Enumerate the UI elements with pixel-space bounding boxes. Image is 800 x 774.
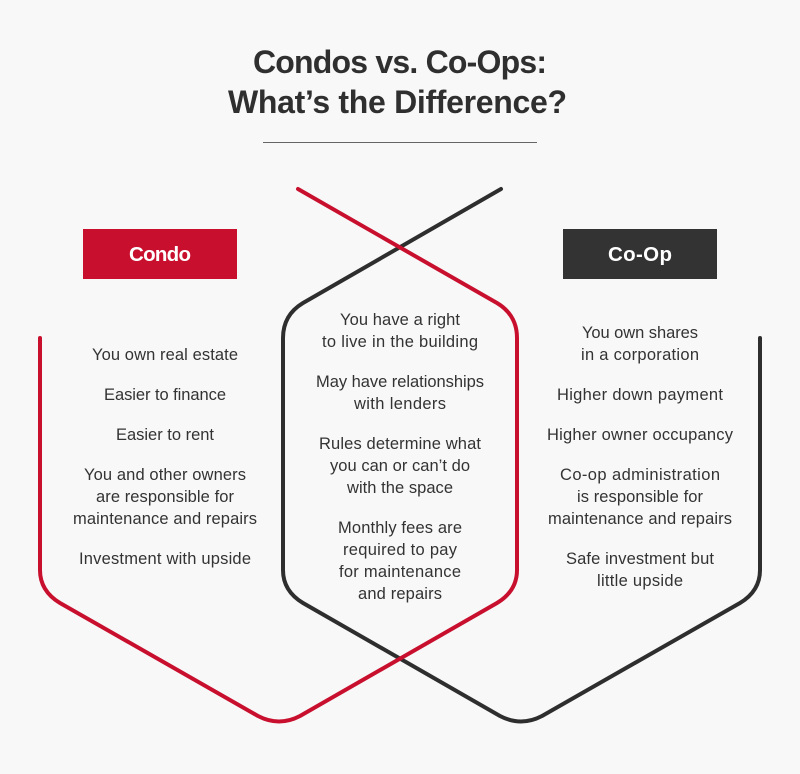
- co-op text list: little upside: [597, 572, 683, 590]
- condo label: Condo: [129, 243, 191, 266]
- co-op text list: Higher down payment: [557, 386, 723, 404]
- title: What’s the Difference?: [228, 84, 567, 120]
- condo text list: [73, 346, 257, 568]
- co-op text list: maintenance and repairs: [548, 510, 732, 528]
- condo text list: Investment with upside: [79, 550, 251, 568]
- condo text list: Easier to rent: [116, 426, 214, 444]
- shared text list: You have a right: [340, 311, 460, 329]
- shared text list: with the space: [346, 479, 453, 497]
- shared text list: May have relationships: [316, 373, 484, 391]
- co-op text list: Co-op administration: [560, 466, 720, 484]
- title: Condos vs. Co-Ops:: [253, 44, 547, 80]
- condo text list: are responsible for: [96, 488, 234, 506]
- co-op label: [563, 229, 717, 279]
- condo text list: maintenance and repairs: [73, 510, 257, 528]
- red hexagon outline: condo: [40, 189, 517, 722]
- co-op text list: You own shares: [582, 324, 698, 342]
- shared text list: with lenders: [353, 395, 446, 413]
- co-op label: Co-Op: [608, 243, 672, 266]
- shared text list: [316, 311, 484, 603]
- shared text list: to live in the building: [322, 333, 478, 351]
- title: [228, 44, 567, 120]
- co-op text list: Safe investment but: [566, 550, 714, 568]
- condo text list: You and other owners: [84, 466, 246, 484]
- condo text list: You own real estate: [92, 346, 238, 364]
- condo text list: Easier to finance: [104, 386, 226, 404]
- shared text list: you can or can’t do: [330, 457, 470, 475]
- co-op text list: in a corporation: [581, 346, 699, 364]
- shared text list: Monthly fees are: [338, 519, 462, 537]
- co-op text list: [547, 324, 734, 590]
- co-op text list: Higher owner occupancy: [547, 426, 734, 444]
- shared text list: for maintenance: [339, 563, 461, 581]
- shared text list: required to pay: [343, 541, 458, 559]
- shared text list: Rules determine what: [319, 435, 481, 453]
- black hexagon outline: co-op: [283, 189, 760, 722]
- shared text list: and repairs: [358, 585, 442, 603]
- co-op text list: is responsible for: [577, 488, 704, 506]
- condo label: [83, 229, 237, 279]
